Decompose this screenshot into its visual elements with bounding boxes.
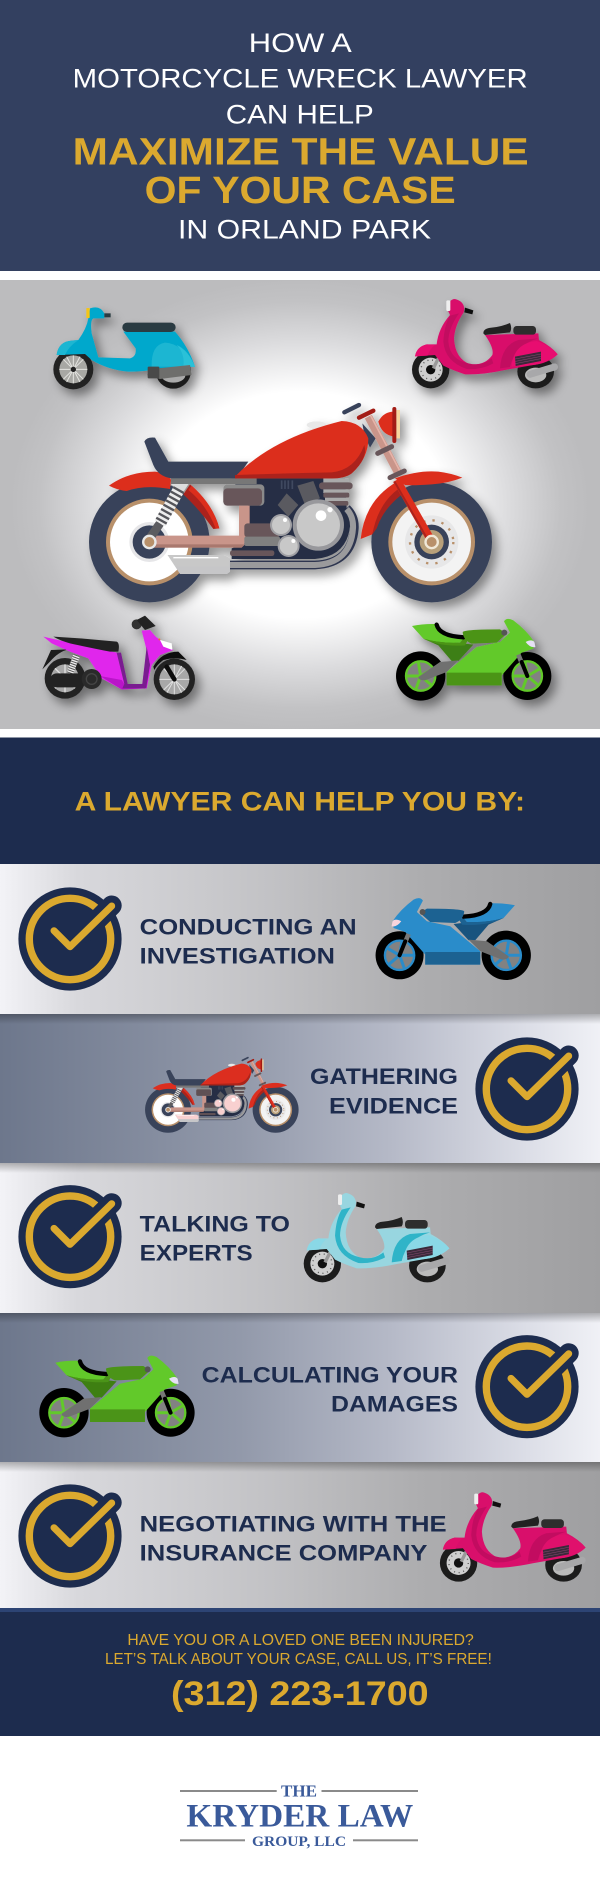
icon: green sport bike: [396, 619, 551, 701]
icon: red cruiser motorcycle: [89, 405, 492, 602]
title: MOTORCYCLE WRECK LAWYER: [73, 64, 528, 94]
icon: pink scooter: [440, 1492, 586, 1582]
panel: call to action: [0, 1608, 600, 1736]
text: gathering evidence: EVIDENCE: [329, 1094, 458, 1119]
phone number: (312) 223-1700: [171, 1675, 429, 1713]
icon: check badge: [475, 1335, 579, 1438]
text: conducting an investigation: [140, 914, 357, 969]
panel: conducting an investigation: [0, 864, 600, 1014]
title: CAN HELP: [226, 100, 374, 130]
panel: talking to experts: [0, 1163, 600, 1313]
icon: check badge: [18, 887, 122, 991]
text: calculating your damages: CALCULATING YOUR: [202, 1362, 458, 1387]
text: calculating your damages: [202, 1362, 458, 1417]
text: talking to experts: TALKING TO: [140, 1211, 290, 1236]
panel: gathering evidence: [0, 1014, 600, 1163]
logo: the kryder law group: GROUP, LLC: [252, 1834, 346, 1850]
text: call to action: HAVE YOU OR A LOVED ONE BEEN INJURED?: [127, 1632, 474, 1649]
text: negotiating with the insurance company: INSURANCE COMPANY: [140, 1541, 427, 1566]
text: gathering evidence: [310, 1064, 458, 1119]
panel: negotiating with the insurance company: [0, 1462, 600, 1608]
panel: hero motorcycles: [0, 280, 600, 729]
icon: pink scooter: [412, 299, 558, 388]
text: call to action: LET’S TALK ABOUT YOUR CASE, CALL US, IT’S FREE!: [105, 1651, 492, 1668]
icon: magenta scooter: [42, 616, 195, 700]
title: OF YOUR CASE: [145, 169, 456, 211]
logo: the kryder law group: KRYDER LAW: [186, 1799, 413, 1835]
text: negotiating with the insurance company: NEGOTIATING WITH THE: [140, 1511, 447, 1536]
logo: the kryder law group: [180, 1782, 418, 1850]
icon: check badge: [18, 1185, 122, 1288]
icon: check badge: [475, 1037, 579, 1141]
icon: small cruiser: [145, 1058, 299, 1133]
text: negotiating with the insurance company: [140, 1511, 447, 1566]
title: MAXIMIZE THE VALUE: [73, 130, 529, 172]
heading: a lawyer can help you by: A LAWYER CAN HELP YOU BY:: [75, 787, 525, 817]
icon: pale blue scooter: [304, 1193, 449, 1282]
panel: calculating your damages: [0, 1313, 600, 1462]
text: calculating your damages: DAMAGES: [331, 1392, 458, 1417]
icon: check badge: [18, 1484, 122, 1588]
title: IN ORLAND PARK: [178, 215, 431, 245]
icon: blue sport bike: [376, 898, 531, 980]
text: talking to experts: [140, 1211, 290, 1266]
title: [73, 28, 529, 245]
panel: heading band: [0, 738, 600, 864]
text: talking to experts: EXPERTS: [140, 1241, 253, 1266]
logo: the kryder law group: THE: [281, 1782, 317, 1801]
title: HOW A: [249, 28, 352, 58]
icon: teal scooter: [53, 307, 195, 389]
text: conducting an investigation: INVESTIGATION: [140, 944, 335, 969]
text: conducting an investigation: CONDUCTING AN: [140, 914, 357, 939]
icon: green sport bike: [39, 1356, 195, 1437]
text: gathering evidence: GATHERING: [310, 1064, 458, 1089]
text: call to action: [105, 1632, 492, 1668]
header band: [0, 0, 600, 271]
